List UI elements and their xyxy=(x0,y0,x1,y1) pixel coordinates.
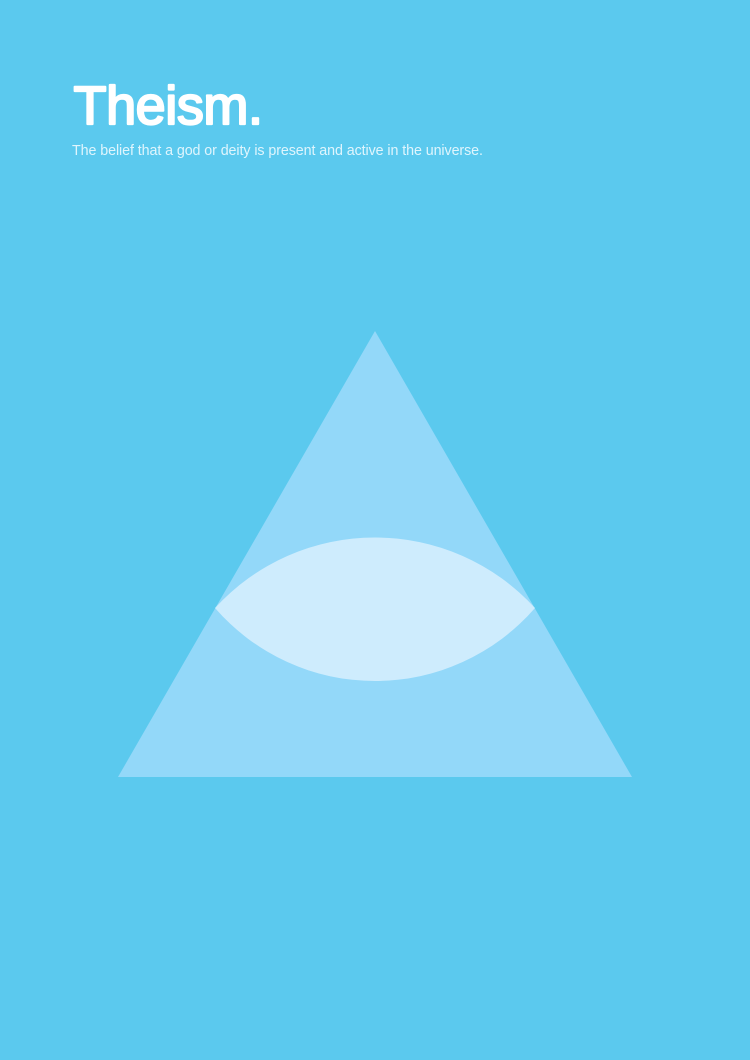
subtitle: The belief that a god or deity is present and active in the universe. xyxy=(72,143,483,159)
title: Theism. xyxy=(74,76,263,136)
triangle xyxy=(118,331,632,777)
icon: all-seeing eye in triangle xyxy=(118,331,632,777)
eye xyxy=(215,537,535,681)
